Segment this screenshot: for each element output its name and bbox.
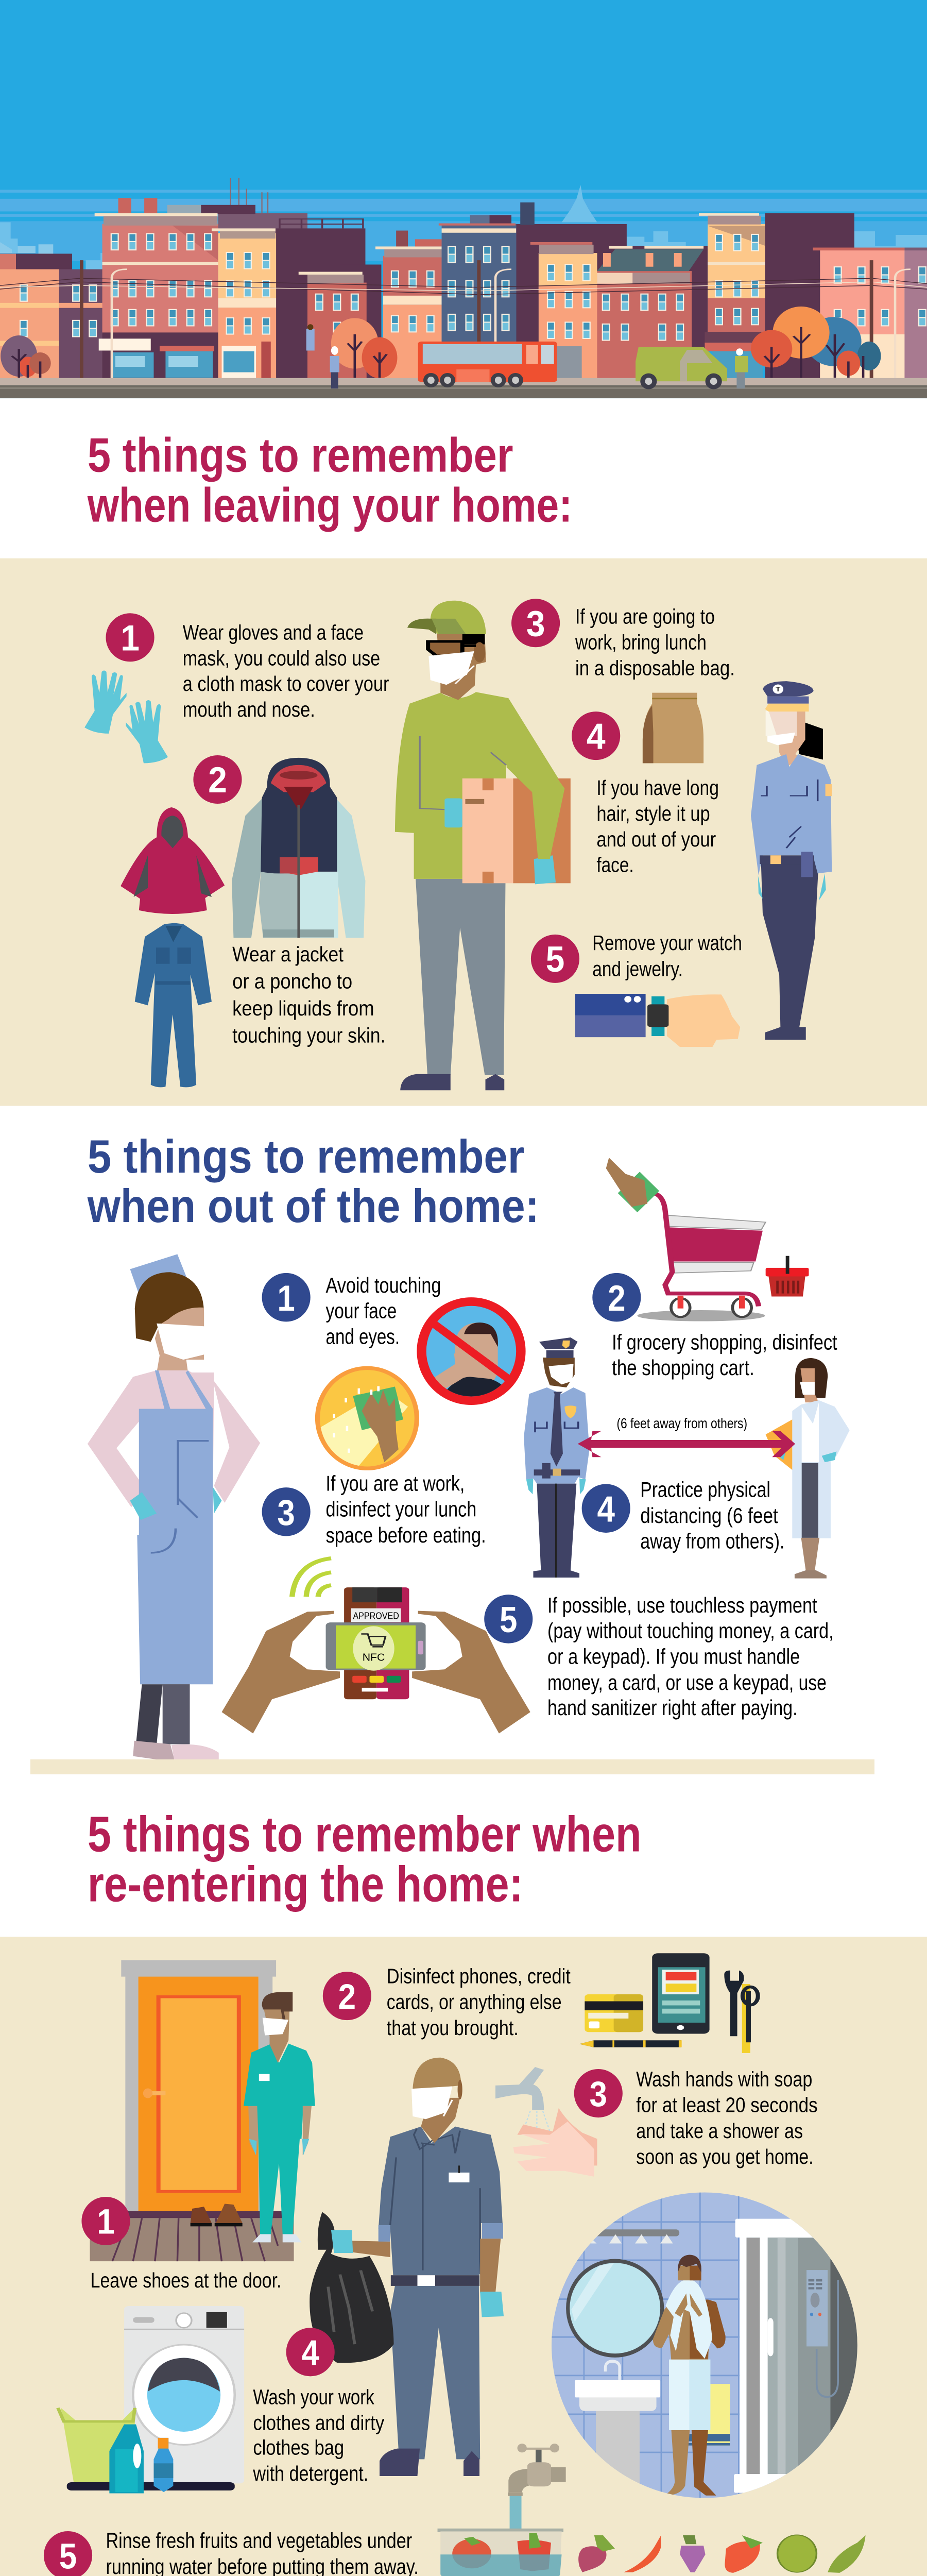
step 4 badge — [286, 2328, 335, 2376]
step 4 text: If you have long — [596, 776, 719, 800]
step 4 text — [640, 1478, 784, 1553]
step 3 badge — [511, 599, 560, 647]
step 4 badge: 4 — [597, 1489, 615, 1530]
step 3 text: space before eating. — [326, 1523, 486, 1547]
step 1 badge: 1 — [121, 618, 140, 658]
step 1 text: mouth and nose. — [183, 698, 315, 721]
step 1 text — [183, 621, 389, 721]
step 2 text — [612, 1330, 837, 1380]
step 4 text — [253, 2385, 385, 2485]
step 3 text: disinfect your lunch — [326, 1497, 476, 1521]
step 3 badge: 3 — [277, 1493, 295, 1533]
step 2 text: or a poncho to — [232, 970, 352, 993]
step 1 badge: 1 — [277, 1278, 295, 1319]
icon: paper bag — [643, 693, 703, 763]
panel: re-entering the home — [0, 1937, 927, 2576]
step 2 text: that you brought. — [387, 2016, 519, 2040]
step 2 text: Disinfect phones, credit — [387, 1964, 571, 1988]
step 1 text: your face — [326, 1299, 397, 1323]
windows — [20, 233, 926, 341]
step 5 text — [106, 2529, 419, 2576]
title: leaving home — [87, 428, 572, 532]
title: leaving home: 5 things to remember — [88, 428, 513, 482]
step 1 text: Avoid touching — [326, 1274, 441, 1297]
step 3 text: and take a shower as — [636, 2119, 803, 2143]
step 3 text — [636, 2067, 818, 2168]
figure: doctor — [766, 1358, 850, 1579]
icon: jacket — [232, 758, 365, 938]
panel: rinse produce: Rinse fresh fruits and vegetables under — [106, 2529, 412, 2553]
step 3 text: work, bring lunch — [575, 631, 707, 654]
step 3 text: If you are at work, — [326, 1471, 465, 1496]
icon: washing machine and laundry — [58, 2306, 244, 2494]
icon: contactless phone payment: APPROVED — [353, 1611, 399, 1621]
label: six feet away: (6 feet away from others) — [616, 1415, 747, 1431]
figure: delivery man — [395, 601, 571, 1090]
step 5 badge: 5 — [500, 1600, 517, 1640]
step 4 badge: 4 — [301, 2333, 319, 2372]
step 4 text: clothes and dirty — [253, 2411, 385, 2435]
step 2 text: the shopping cart. — [612, 1356, 754, 1380]
icon: contactless phone payment: NFC — [363, 1652, 385, 1664]
figure: transit officer: T — [776, 686, 781, 693]
figure: transit officer — [751, 681, 832, 1040]
tiny people — [306, 324, 748, 388]
figure: worker with trash bag — [310, 2058, 504, 2476]
icon: faucet and washing hands — [495, 2067, 597, 2177]
illustration: door and shoes — [90, 1960, 294, 2261]
step 2 badge — [323, 1972, 371, 2020]
step 2 badge: 2 — [208, 760, 227, 801]
step 3 text — [575, 605, 735, 680]
step 2 text — [387, 1964, 571, 2040]
icon: disinfect lunch table — [315, 1366, 419, 1471]
step 1 text: Leave shoes at the door. — [91, 2268, 281, 2292]
heading: re-entering home — [88, 1806, 642, 1912]
van — [636, 347, 727, 389]
panel: leaving your home — [0, 558, 927, 1106]
sidewalk and road — [0, 378, 927, 398]
icon: poncho — [121, 807, 225, 914]
step 3 badge — [574, 2069, 623, 2117]
step 5 badge — [531, 935, 579, 983]
panel: leaving your home: Remove your watch — [592, 931, 742, 955]
figure: nurse in apron — [88, 1254, 260, 1762]
icon: do not touch face — [417, 1297, 526, 1405]
step 1 badge — [106, 613, 154, 662]
step 4 text: Wash your work — [253, 2385, 374, 2409]
step 4 badge — [582, 1484, 630, 1533]
step 2 text: cards, or anything else — [387, 1990, 562, 2013]
step 4 badge — [572, 711, 620, 760]
icon: phone, card, pen and tools — [579, 1953, 758, 2053]
step 3 text: If you are going to — [575, 605, 715, 628]
panel: rinse produce — [44, 2444, 866, 2576]
step 5 text: and jewelry. — [592, 957, 683, 980]
step 2 badge — [592, 1273, 641, 1321]
step 2 badge: 2 — [338, 1977, 356, 2016]
icon: contactless phone payment — [221, 1558, 530, 1734]
step 4 text: distancing (6 feet — [640, 1504, 778, 1528]
heading: out of the home — [87, 1130, 539, 1232]
figure: scrubs worker — [244, 1992, 315, 2242]
step 2 text — [232, 942, 385, 1047]
far buildings and dark blocks — [0, 198, 854, 380]
street trees — [1, 307, 881, 378]
icon: coveralls — [135, 923, 212, 1087]
icons: vegetables and fruit — [578, 2535, 866, 2573]
step 4 text: with detergent. — [253, 2462, 368, 2485]
step 4 badge: 4 — [587, 717, 606, 757]
step 2 badge: 2 — [608, 1278, 626, 1319]
step 1 text: a cloth mask to cover your — [183, 672, 389, 696]
step 1 text: Wear gloves and a face — [183, 621, 364, 644]
step 1 badge: 1 — [97, 2202, 115, 2242]
divider bar — [30, 1759, 874, 1774]
step 5 badge — [44, 2531, 92, 2576]
step 4 text — [596, 776, 719, 876]
panel: out of the home — [87, 1130, 850, 1762]
step 1 text — [326, 1274, 441, 1349]
heading: out of the home: when out of the home: — [87, 1180, 539, 1232]
step 1 badge — [262, 1273, 311, 1321]
step 3 badge — [262, 1487, 311, 1536]
step 1 text: and eyes. — [326, 1325, 400, 1349]
step 5 text — [547, 1594, 834, 1720]
step 5 text — [592, 931, 742, 980]
step 2 text: Wear a jacket — [232, 942, 344, 966]
step 4 text: and out of your — [596, 827, 716, 851]
step 2 badge — [193, 755, 242, 804]
arrow: six feet distance — [578, 1431, 795, 1457]
icon: watch on wrist — [575, 994, 740, 1047]
icon: gloves — [84, 670, 168, 763]
bus — [418, 342, 557, 387]
icon: faucet over bowl — [438, 2444, 566, 2576]
illustration: man in bathroom circle — [552, 2193, 857, 2498]
step 3 badge: 3 — [526, 604, 545, 644]
step 1 text: mask, you could also use — [183, 646, 380, 670]
building row — [0, 213, 927, 381]
heading: out of the home: 5 things to remember — [88, 1130, 524, 1183]
step 3 badge: 3 — [590, 2074, 607, 2114]
heading: re-entering home: re-entering the home: — [88, 1856, 523, 1912]
street poles and wires — [0, 260, 927, 384]
step 1 badge — [81, 2197, 130, 2245]
figure: police officer — [524, 1337, 590, 1578]
step 2 text: keep liquids from — [232, 996, 374, 1020]
step 2 text: touching your skin. — [232, 1024, 385, 1047]
step 5 badge — [484, 1595, 533, 1643]
step 5 badge: 5 — [59, 2536, 77, 2576]
step 4 text: away from others). — [640, 1529, 784, 1553]
icon: shopping cart — [606, 1158, 809, 1321]
step 3 text: in a disposable bag. — [575, 656, 735, 680]
step 4 text: Practice physical — [640, 1478, 770, 1501]
step 4 text: face. — [596, 853, 634, 876]
illustration: city street banner — [0, 0, 927, 398]
step 5 badge: 5 — [546, 940, 564, 980]
step 4 text: clothes bag — [253, 2435, 344, 2459]
step 3 text — [326, 1471, 486, 1547]
step 4 text: hair, style it up — [596, 802, 710, 825]
